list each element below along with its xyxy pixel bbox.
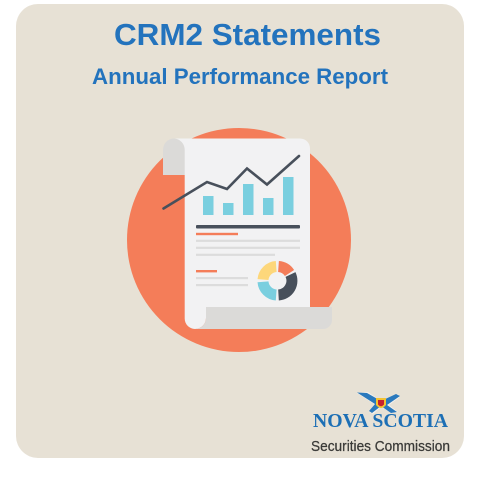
donut chart bbox=[263, 266, 292, 295]
icon: Nova Scotia flag bbox=[357, 392, 400, 414]
subtitle: Annual Performance Report bbox=[92, 64, 389, 89]
trend line bbox=[164, 156, 299, 208]
logo: Nova Scotia Securities Commission bbox=[311, 392, 450, 455]
document top curl bbox=[163, 138, 185, 175]
document page bbox=[174, 138, 310, 329]
icon: report document bbox=[163, 138, 332, 329]
commission label: Securities Commission bbox=[311, 438, 450, 455]
wordmark: NOVA SCOTIA bbox=[313, 410, 448, 432]
document bottom roll bbox=[195, 307, 332, 329]
icon: orange circle bbox=[127, 128, 351, 352]
bar chart bbox=[203, 177, 294, 215]
text lines bbox=[196, 225, 300, 286]
title: CRM2 Statements bbox=[114, 17, 381, 52]
